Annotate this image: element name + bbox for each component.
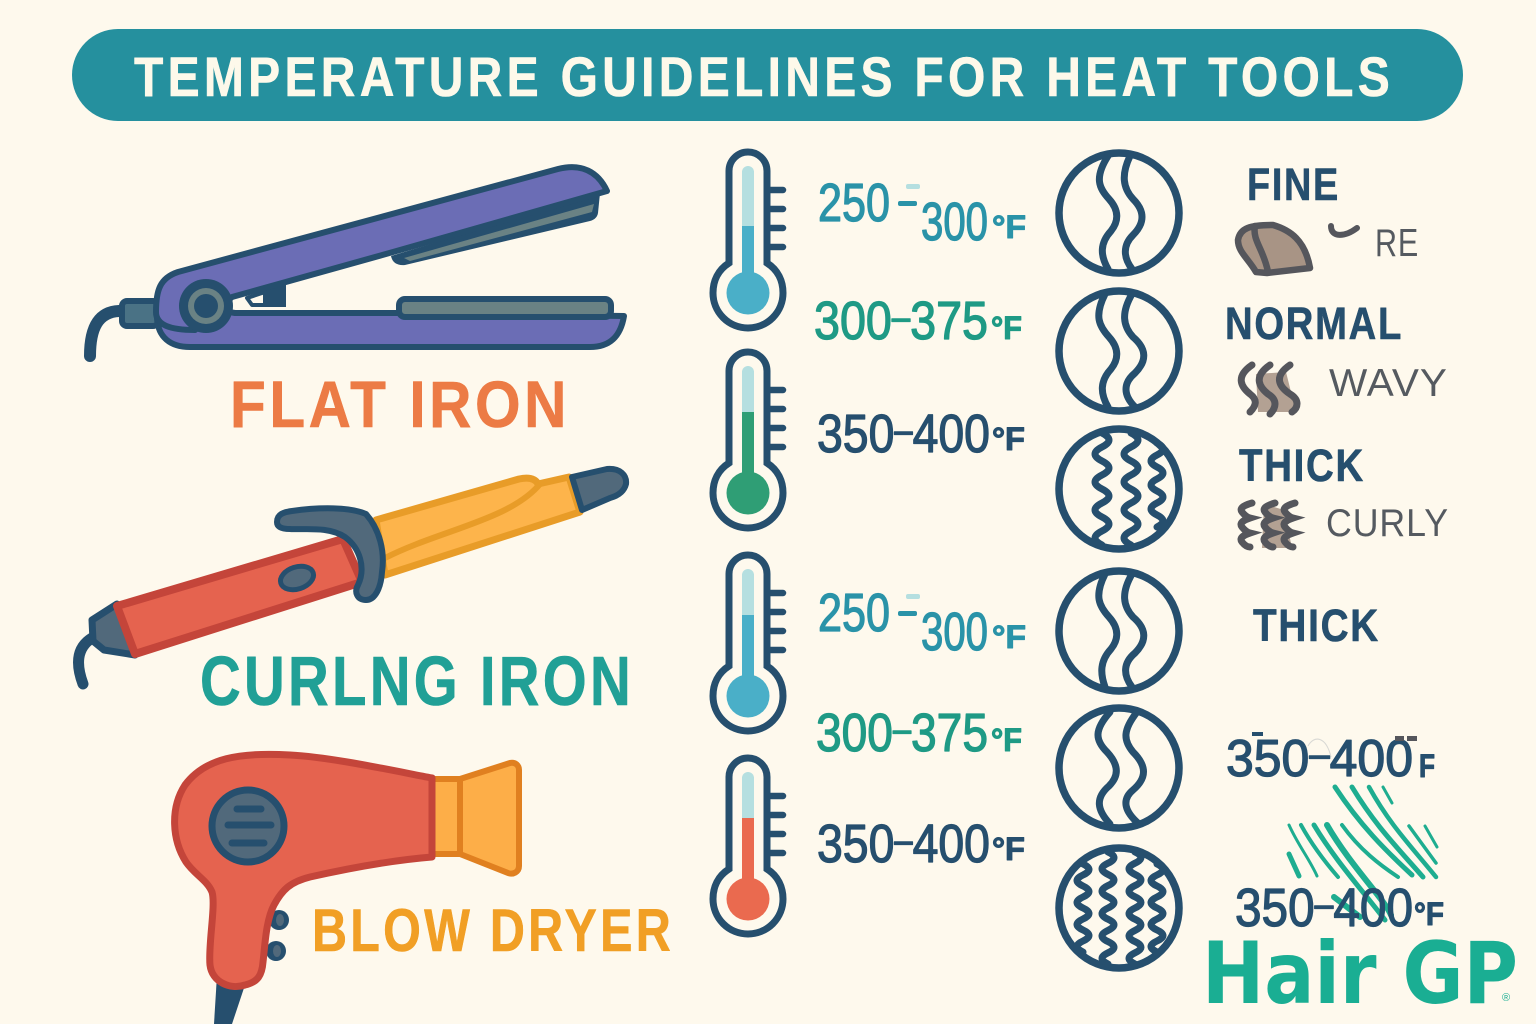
temperature: 300-375 F, second: 375 [911,703,988,763]
hair strand circle: medium [1059,708,1179,828]
temperature: 350-400 F, right column bottom: – [1315,884,1334,926]
temperature: 250-300 F, second [818,583,1026,662]
temperature: 350-400 F, second: 350 [817,814,907,874]
text: wavy: WAVY [1329,362,1448,405]
logo: Hair GP: ® [1502,992,1510,1004]
title banner [72,29,1463,121]
icon: flat iron [90,167,624,356]
temperature: 250-300 F, first: °F [992,209,1026,245]
label: normal: NORMAL [1225,298,1403,349]
temperature: 350-400 F, first: 400 [913,404,990,464]
panel: flat iron [90,167,624,441]
temperature: 350-400 F, first: °F [992,421,1025,457]
temperature: 250-300 F, second: °F [992,619,1026,655]
panel: curling iron [79,469,634,720]
label: flat iron: FLAT IRON [230,367,570,441]
temperature: 350-400 F, right column bottom: 350 [1235,878,1325,938]
icon: curly hair swatch [1241,503,1295,548]
hair strand circle: fine [1059,153,1179,273]
label: thick: THICK [1253,600,1380,651]
thermometer: blue, curling iron [713,555,783,731]
temperature: 350-400 F, first [817,404,1025,464]
temperature: 300-375 F, first [814,291,1022,351]
hair strand circle: coarse curly [1059,848,1179,968]
label: thick, curly row: THICK [1239,440,1365,491]
icon: wavy hair swatch [1241,365,1297,414]
temperature: 350-400 F, second: – [894,820,913,862]
thermometer: green, flat iron high [713,352,783,528]
temperature: 300-375 F, first: 300 [814,291,904,351]
thermometer: red, blow dryer [713,758,783,934]
decorative hair strands: green [1289,787,1437,920]
temperature: 350-400 F, first: 350 [817,404,907,464]
label: blow dryer: BLOW DRYER [312,897,674,964]
temperature: 350-400 F, right column top: 400 [1330,730,1413,788]
label: curling iron: CURLNG IRON [200,642,634,720]
temperature: 350-400 F, right column bottom [1235,878,1444,938]
hair strand circle: normal [1059,291,1179,411]
temperature: 250-300 F, second: 300 [921,602,988,662]
panel: blow dryer [175,754,674,1024]
temperature: 350-400 F, right column top: 350 [1226,730,1313,788]
label: fine: FINE [1247,159,1340,210]
icon: curling iron [79,469,626,684]
text: curly: CURLY [1326,502,1449,545]
thermometer: blue, flat iron low [713,152,783,328]
temperature: 300-375 F, second: °F [991,722,1022,758]
temperature: 350-400 F, right column top: – [1309,734,1330,776]
temperature: 250-300 F, first: 250 [818,173,890,233]
temperature: 350-400 F, first: – [894,410,913,452]
temperature: 350-400 F, second: 400 [913,814,990,874]
temperature: 300-375 F, first: – [892,297,911,339]
text: re: RE [1375,222,1419,265]
temperature: 250-300 F, first [818,173,1026,252]
icon: fine hair swatch [1238,225,1357,273]
temperature: 350-400 F, second [817,814,1025,874]
temperature: 250-300 F, first: 300 [921,192,988,252]
temperature: 350-400 F, second: °F [992,831,1025,867]
temperature: 300-375 F, second [816,703,1022,763]
temperature: 300-375 F, first: °F [991,310,1022,346]
temperature: 350-400 F, right column top [1226,730,1435,788]
temperature: 350-400 F, right column bottom: °F [1414,896,1444,932]
temperature: 300-375 F, first: 375 [910,291,988,351]
temperature: 350-400 F, right column bottom: 400 [1333,878,1413,938]
temperature: 250-300 F, second: 250 [818,583,890,643]
temperature: 300-375 F, second: – [893,709,912,751]
hair strand circle: thick [1059,571,1179,691]
icon: blow dryer [175,754,519,1024]
hair strand circle: thick curly [1059,429,1179,549]
temperature: 350-400 F, right column top: F [1419,748,1435,784]
temperature: 300-375 F, second: 300 [816,703,906,763]
